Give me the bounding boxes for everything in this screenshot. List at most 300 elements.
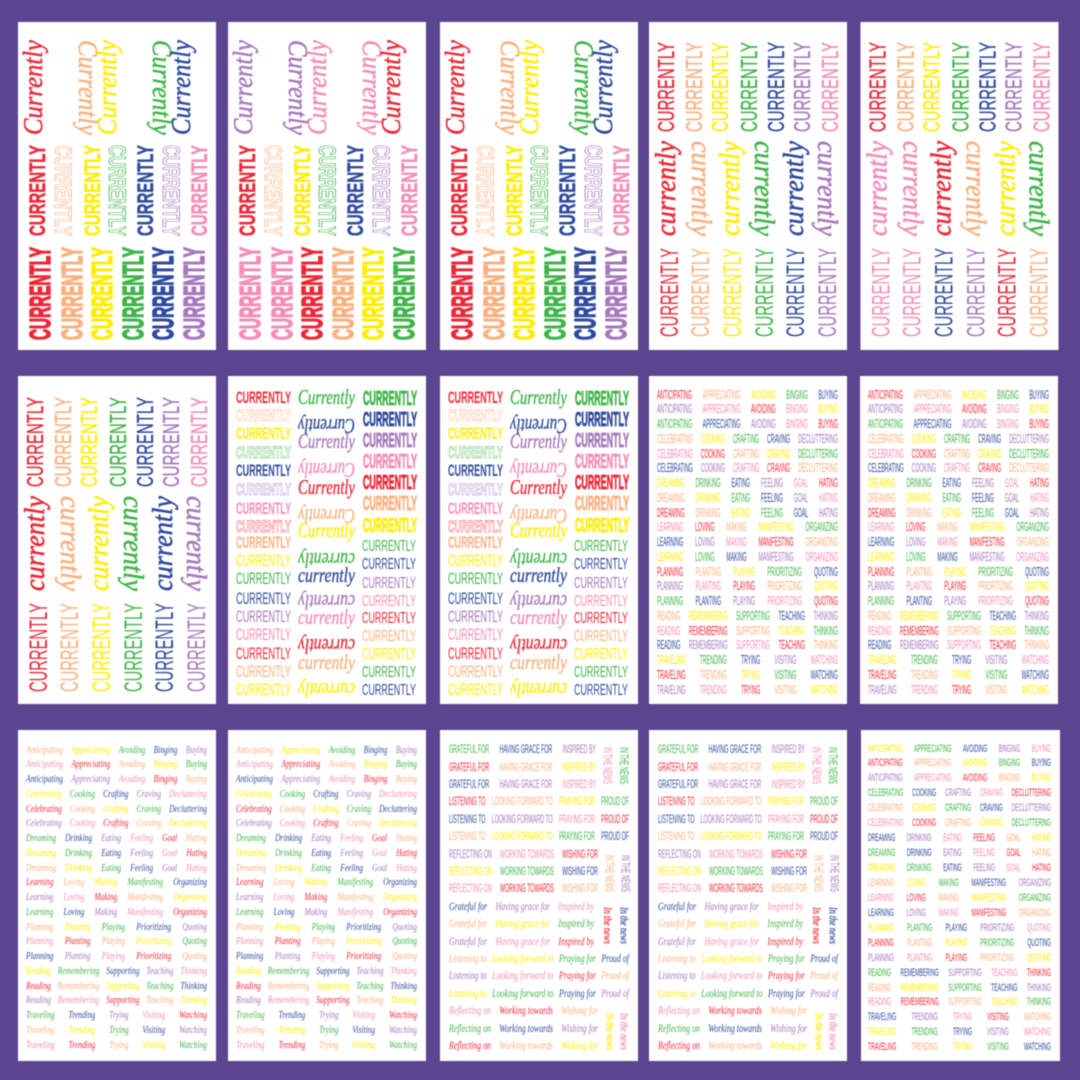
word rows: DECLUTTERING xyxy=(1012,817,1051,829)
word rows: MAKING xyxy=(726,535,747,549)
word rows: CELEBRATING xyxy=(657,447,693,461)
word rows: DREAMING xyxy=(868,476,896,490)
word rows: Quoting xyxy=(392,950,417,962)
word rows: Feeling xyxy=(130,847,153,859)
word rows: Dreaming xyxy=(236,862,266,874)
word rows: Dreaming xyxy=(236,832,266,844)
word rows: Supporting xyxy=(316,980,349,992)
word rows: THINKING xyxy=(1024,624,1049,638)
script currently words: Currently xyxy=(376,40,406,135)
display currently words: CURRENTLY xyxy=(49,145,76,236)
word rows: Visiting xyxy=(352,1009,375,1021)
word rows: Playing xyxy=(102,935,125,947)
word rows: PLAYING xyxy=(733,565,755,579)
word rows: DREAMING xyxy=(657,491,685,505)
word rows: THINKING xyxy=(813,624,838,638)
phrase rows: HAVING GRACE FOR xyxy=(500,760,552,774)
word rows: Organizing xyxy=(173,876,207,888)
phrase rows: PROUD OF xyxy=(810,812,838,826)
word rows: Feeling xyxy=(130,832,153,844)
word rows: Traveling xyxy=(26,1024,55,1036)
thin currently words: CURRENTLY xyxy=(25,603,53,692)
word rows: CELEBRATING xyxy=(868,787,903,799)
display currently words: CURRENTLY xyxy=(447,145,472,236)
phrase rows: WISHING FOR xyxy=(771,881,807,895)
word rows: LOVING xyxy=(907,892,926,904)
word rows: APPRECIATING xyxy=(914,417,951,431)
word rows: PLANTING xyxy=(907,922,932,934)
column of heavy and light capital currently words: CURRENTLY xyxy=(574,556,628,573)
word rows: Reading xyxy=(236,994,261,1006)
word rows: DRINKING xyxy=(907,476,932,490)
word rows: TEACHING xyxy=(989,638,1016,652)
word rows: AVOIDING xyxy=(751,402,776,416)
word rows: COOKING xyxy=(912,461,936,475)
phrase rows: Looking forward to xyxy=(492,951,553,965)
word rows: Reading xyxy=(26,980,51,992)
display currently words: CURRENTLY xyxy=(579,145,606,236)
word rows: Teaching xyxy=(146,965,174,977)
column of display and thin currently words: CURRENTLY xyxy=(236,389,291,407)
column of display and thin currently words: CURRENTLY xyxy=(448,407,503,425)
phrase rows: Inspired by xyxy=(558,916,594,930)
word rows: Manifesting xyxy=(127,876,163,888)
column of script currently words: Currently xyxy=(298,414,355,438)
word rows: TRYING xyxy=(741,668,760,682)
word rows: Visiting xyxy=(352,1039,375,1051)
phrase rows: Working towards xyxy=(708,1038,762,1052)
word rows: MANIFESTING xyxy=(759,520,794,534)
word rows: COOKING xyxy=(912,432,936,446)
word rows: TRAVELING xyxy=(868,1011,896,1023)
vertical in the news labels: IN THE NEWS xyxy=(810,747,824,784)
script currently words: currently xyxy=(180,496,212,591)
word rows: TRENDING xyxy=(700,683,727,697)
phrase rows: Listening to xyxy=(658,986,696,1000)
word rows: COOKING xyxy=(912,817,936,829)
column of script currently words: currently xyxy=(509,634,567,658)
phrase rows: GRATEFUL FOR xyxy=(449,760,489,774)
word rows: DECLUTTERING xyxy=(1012,787,1051,799)
word rows: TEACHING xyxy=(778,609,805,623)
word rows: Trending xyxy=(68,1009,95,1021)
word rows: Planting xyxy=(65,921,90,933)
word rows: Crafting xyxy=(313,788,339,800)
display currently words: CURRENTLY xyxy=(343,145,368,236)
word rows: Manifesting xyxy=(337,906,373,918)
script currently words xyxy=(19,496,212,591)
word rows: Feeling xyxy=(340,832,363,844)
word rows: SUPPORTING xyxy=(947,624,981,638)
thin currently words: CURRENTLY xyxy=(1026,248,1054,337)
word rows: COOKING xyxy=(701,432,725,446)
phrase rows: Grateful for xyxy=(449,899,487,913)
vertical in the news labels: In the news xyxy=(618,906,632,944)
word rows: Avoiding xyxy=(119,758,145,770)
word rows: CRAVING xyxy=(767,432,790,446)
phrase rows: Reflecting on xyxy=(658,1021,700,1035)
word rows: TRAVELING xyxy=(657,668,686,682)
word rows: LOVING xyxy=(906,520,926,534)
column of script currently words: currently xyxy=(510,563,568,587)
word rows: Anticipating xyxy=(26,758,63,770)
column of display and thin currently words: CURRENTLY xyxy=(236,425,291,443)
phrase rows: Listening to xyxy=(658,968,696,982)
word rows: VISITING xyxy=(774,683,796,697)
word rows: QUOTING xyxy=(814,594,838,608)
word rows: MAKING xyxy=(939,907,959,919)
word rows: FEELING xyxy=(972,506,994,520)
display currently words: CURRENTLY xyxy=(157,145,184,236)
phrase rows: PROUD OF xyxy=(601,794,629,808)
column of heavy and light capital currently words: CURRENTLY xyxy=(362,628,416,645)
word rows: Goal xyxy=(162,862,177,874)
word rows: DECLUTTERING xyxy=(798,447,838,461)
word rows: LOVING xyxy=(695,520,715,534)
display currently words: CURRENTLY xyxy=(313,145,340,236)
phrase rows: Grateful for xyxy=(658,916,696,930)
word rows: Teaching xyxy=(356,980,384,992)
word rows: EATING xyxy=(943,832,962,844)
phrase rows: PRAYING FOR xyxy=(768,794,804,808)
word rows: GOAL xyxy=(1005,506,1019,520)
word rows: Binging xyxy=(154,758,177,770)
word rows: COOKING xyxy=(912,447,936,461)
word rows: Reading xyxy=(236,980,261,992)
phrase rows: LISTENING TO xyxy=(658,812,694,826)
script currently words: Currently xyxy=(588,40,618,135)
word rows: Remembering xyxy=(58,994,99,1006)
phrase rows: WISHING FOR xyxy=(562,847,598,861)
word rows: Watching xyxy=(179,1039,207,1051)
column of heavy and light capital currently words xyxy=(574,388,629,699)
column of display and thin currently words: CURRENTLY xyxy=(236,663,291,681)
phrase rows: Proud of xyxy=(810,951,838,965)
phrase rows: GRATEFUL FOR xyxy=(658,777,698,791)
word rows: CRAFTING xyxy=(945,802,971,814)
column of heavy and light capital currently words: CURRENTLY xyxy=(574,646,628,663)
thin currently words: CURRENTLY xyxy=(656,248,684,337)
column of script currently words: Currently xyxy=(298,504,355,528)
display currently words: CURRENTLY xyxy=(187,145,212,236)
capital currently words xyxy=(22,397,212,487)
phrase rows: WISHING FOR xyxy=(562,881,598,895)
word rows: Thinking xyxy=(180,994,207,1006)
phrase rows: Looking forward to xyxy=(701,951,762,965)
phrase rows: Praying for xyxy=(559,986,596,1000)
column of heavy and light capital currently words: CURRENTLY xyxy=(574,593,628,610)
word rows: Drinking xyxy=(65,862,92,874)
word rows: CELEBRATING xyxy=(868,817,903,829)
word rows: DREAMING xyxy=(868,847,895,859)
word rows: Quoting xyxy=(182,935,207,947)
word rows: Decluttering xyxy=(379,803,417,815)
phrase rows: Working towards xyxy=(499,1003,553,1017)
word rows: CRAFTING xyxy=(945,787,971,799)
word rows: Goal xyxy=(372,862,387,874)
word rows: PRIORITIZING xyxy=(767,594,802,608)
word rows: QUOTING xyxy=(1025,594,1049,608)
word rows: LEARNING xyxy=(868,892,894,904)
word rows: Avoiding xyxy=(119,773,145,785)
column of display and thin currently words: CURRENTLY xyxy=(448,500,503,518)
phrase rows: Working towards xyxy=(708,1021,762,1035)
column of display and thin currently words: CURRENTLY xyxy=(236,534,291,552)
word rows: Trying xyxy=(319,1024,339,1036)
phrase rows: Listening to xyxy=(658,951,696,965)
word rows: Buying xyxy=(186,773,207,785)
word rows: Remembering xyxy=(58,980,99,992)
panel: sticker sheet 7: CURRENTLY xyxy=(363,472,417,494)
word rows: REMEMBERING xyxy=(901,996,939,1008)
phrase rows: REFLECTING ON xyxy=(449,864,492,878)
word rows: CRAVING xyxy=(978,461,1001,475)
column of display and thin currently words xyxy=(448,389,503,699)
word rows: LEARNING xyxy=(657,550,683,564)
word rows: BINGING xyxy=(997,402,1019,416)
word rows: PLANTING xyxy=(695,565,721,579)
thin currently words: CURRENTLY xyxy=(898,248,926,337)
word rows: QUOTING xyxy=(1027,952,1051,964)
word rows: LEARNING xyxy=(657,535,683,549)
word rows: Teaching xyxy=(146,980,174,992)
word rows: Playing xyxy=(312,935,335,947)
word rows: Remembering xyxy=(268,965,309,977)
word rows: WATCHING xyxy=(811,668,838,682)
heavy currently words: CURRENTLY xyxy=(570,247,602,340)
word rows: PRIORITIZING xyxy=(980,952,1014,964)
heavy currently words: CURRENTLY xyxy=(447,247,479,340)
thin currently words: CURRENTLY xyxy=(814,248,842,337)
column of display and thin currently words: CURRENTLY xyxy=(236,552,291,570)
word rows: WATCHING xyxy=(1022,668,1049,682)
heavy currently words xyxy=(447,247,633,340)
script currently words: Currently xyxy=(302,40,332,135)
panel: sticker sheet 7: CURRENTLY xyxy=(363,430,417,452)
phrase rows: Praying for xyxy=(559,951,596,965)
word rows: Anticipating xyxy=(26,773,63,785)
heavy currently words: CURRENTLY xyxy=(57,247,89,340)
phrase rows: Having grace for xyxy=(704,899,759,913)
script currently words: currently xyxy=(54,496,86,591)
column of display and thin currently words: CURRENTLY xyxy=(236,500,291,518)
word rows: FEELING xyxy=(973,847,995,859)
word rows: Prioritizing xyxy=(346,950,381,962)
phrase rows: Praying for xyxy=(768,968,805,982)
phrase rows: LOOKING FORWARD TO xyxy=(492,829,553,843)
word rows: Planning xyxy=(26,921,53,933)
column of script currently words: Currently xyxy=(510,475,567,499)
display currently words xyxy=(235,145,422,236)
word rows: TRENDING xyxy=(911,1026,938,1038)
panel: sticker sheet 1 xyxy=(18,22,216,350)
phrase rows: LOOKING FORWARD TO xyxy=(492,812,553,826)
script currently words: currently xyxy=(990,141,1022,236)
word rows: Decluttering xyxy=(379,788,417,800)
word rows: MANIFESTING xyxy=(970,550,1005,564)
word rows: PLANNING xyxy=(868,922,894,934)
word rows: APPRECIATING xyxy=(914,757,951,769)
word rows: Avoiding xyxy=(119,744,145,756)
word rows: Manifesting xyxy=(127,906,163,918)
word rows: DRINKING xyxy=(907,506,932,520)
word rows: Visiting xyxy=(142,1024,165,1036)
word rows: Appreciating xyxy=(281,773,320,785)
word rows: READING xyxy=(868,624,891,638)
vertical in the news labels xyxy=(600,746,633,1051)
script currently words: currently xyxy=(83,496,115,591)
phrase rows: Inspired by xyxy=(767,934,803,948)
display currently words: CURRENTLY xyxy=(555,145,580,236)
word rows: Reading xyxy=(236,965,261,977)
script currently words xyxy=(440,40,618,135)
word rows: Trending xyxy=(278,1024,305,1036)
word rows: Drinking xyxy=(65,832,92,844)
word rows: Buying xyxy=(396,744,417,756)
word rows: Making xyxy=(94,891,117,903)
vertical in the news labels: IN THE NEWS xyxy=(826,747,840,784)
word rows: QUOTING xyxy=(1027,937,1051,949)
word rows: DRINKING xyxy=(907,862,932,874)
phrase rows: LOOKING FORWARD TO xyxy=(701,829,762,843)
thin currently words: CURRENTLY xyxy=(151,603,179,692)
word rows: Watching xyxy=(179,1009,207,1021)
vertical in the news labels: In the news xyxy=(604,1012,618,1050)
thin currently words: CURRENTLY xyxy=(687,248,715,337)
word rows: Supporting xyxy=(106,965,139,977)
word rows: READING xyxy=(657,638,680,652)
capital currently words: CURRENTLY xyxy=(132,397,158,487)
word rows: Traveling xyxy=(236,1039,265,1051)
word rows: BUYING xyxy=(1029,417,1049,431)
word rows: Prioritizing xyxy=(346,935,381,947)
phrase rows: Looking forward to xyxy=(492,986,553,1000)
heavy currently words: CURRENTLY xyxy=(328,247,360,340)
column of display and thin currently words: CURRENTLY xyxy=(236,608,291,626)
word rows: READING xyxy=(868,609,891,623)
phrase rows: Proud of xyxy=(601,951,629,965)
word rows: READING xyxy=(868,638,891,652)
display currently words: CURRENTLY xyxy=(80,145,105,236)
column of display and thin currently words: CURRENTLY xyxy=(236,407,291,425)
word rows: CRAVING xyxy=(978,432,1001,446)
word rows: Feeling xyxy=(340,862,363,874)
word rows: CRAFTING xyxy=(733,432,759,446)
word rows: PLANTING xyxy=(695,594,721,608)
script currently words: Currently xyxy=(73,40,103,135)
word rows: TRYING xyxy=(953,1011,972,1023)
phrase rows: WORKING TOWARDS xyxy=(709,847,763,861)
word rows: Hating xyxy=(396,832,417,844)
word rows: PLANNING xyxy=(868,952,894,964)
column of display and thin currently words: CURRENTLY xyxy=(236,481,291,499)
phrase rows: Proud of xyxy=(810,968,838,982)
phrase rows: Grateful for xyxy=(658,899,696,913)
thin currently words: CURRENTLY xyxy=(183,603,211,692)
phrase rows: Grateful for xyxy=(449,916,487,930)
vertical in the news labels xyxy=(810,746,842,1051)
word rows: Celebrating xyxy=(26,803,62,815)
word rows: Traveling xyxy=(236,1009,265,1021)
column of heavy and light capital currently words: CURRENTLY xyxy=(574,682,628,699)
word rows: Visiting xyxy=(352,1024,375,1036)
thin currently words: CURRENTLY xyxy=(751,248,779,337)
word rows: GOAL xyxy=(1005,491,1019,505)
script currently words: currently xyxy=(926,141,958,236)
phrase rows: PRAYING FOR xyxy=(559,794,595,808)
column of display and thin currently words: CURRENTLY xyxy=(448,608,503,626)
word rows: Quoting xyxy=(182,921,207,933)
word rows: FEELING xyxy=(973,832,995,844)
phrase rows: GRATEFUL FOR xyxy=(658,760,698,774)
word rows: TRENDING xyxy=(911,668,938,682)
word rows: EATING xyxy=(943,847,962,859)
panel: sticker sheet 8: CURRENTLY xyxy=(575,472,629,494)
word rows: APPRECIATING xyxy=(703,417,740,431)
word rows: BINGING xyxy=(999,742,1020,754)
word rows: Anticipating xyxy=(236,773,273,785)
word rows: CRAVING xyxy=(980,817,1003,829)
phrase rows: Looking forward to xyxy=(701,986,762,1000)
script currently words: Currently xyxy=(440,40,470,135)
word rows: Reading xyxy=(26,994,51,1006)
phrase rows: Working towards xyxy=(708,1003,762,1017)
phrase rows: INSPIRED BY xyxy=(563,742,596,756)
column of display and thin currently words: CURRENTLY xyxy=(448,518,503,536)
word rows: HATING xyxy=(819,506,838,520)
word rows: Cooking xyxy=(70,803,95,815)
word rows: COOKING xyxy=(912,787,936,799)
word rows: COOKING xyxy=(701,461,725,475)
word rows: REMEMBERING xyxy=(689,638,728,652)
phrase rows: WORKING TOWARDS xyxy=(709,864,763,878)
word rows: SUPPORTING xyxy=(948,982,982,994)
word rows: PLANTING xyxy=(907,952,932,964)
word rows: CRAVING xyxy=(980,787,1003,799)
word rows: PLANNING xyxy=(868,937,894,949)
word rows: CRAVING xyxy=(978,447,1001,461)
word rows: ANTICIPATING xyxy=(868,388,903,402)
column of display and thin currently words: CURRENTLY xyxy=(236,626,291,644)
word rows: Learning xyxy=(236,876,263,888)
word rows: BINGING xyxy=(786,402,808,416)
word rows: THINKING xyxy=(813,638,838,652)
column of script currently words: Currently xyxy=(298,429,355,453)
word rows: GOAL xyxy=(1007,847,1021,859)
word rows: THINKING xyxy=(1024,609,1049,623)
column of display and thin currently words: CURRENTLY xyxy=(448,663,503,681)
word rows: Crafting xyxy=(313,817,339,829)
word rows: TRAVELING xyxy=(868,683,897,697)
word rows: LOVING xyxy=(695,550,715,564)
script currently words: Currently xyxy=(283,40,313,135)
word rows: Feeling xyxy=(130,862,153,874)
word rows: Manifesting xyxy=(127,891,163,903)
column of script currently words: Currently xyxy=(298,385,355,409)
word rows: TEACHING xyxy=(778,638,805,652)
word rows: SUPPORTING xyxy=(736,624,770,638)
word rows: Drinking xyxy=(275,847,302,859)
word rows: DREAMING xyxy=(868,506,896,520)
heavy currently words xyxy=(25,247,211,340)
word rows: BUYING xyxy=(818,402,838,416)
word rows: BUYING xyxy=(1029,388,1049,402)
word rows: Hating xyxy=(186,862,207,874)
column of display and thin currently words: CURRENTLY xyxy=(448,590,503,608)
display currently words: CURRENTLY xyxy=(502,145,527,236)
word rows: Binging xyxy=(154,773,177,785)
phrase rows: REFLECTING ON xyxy=(658,881,701,895)
